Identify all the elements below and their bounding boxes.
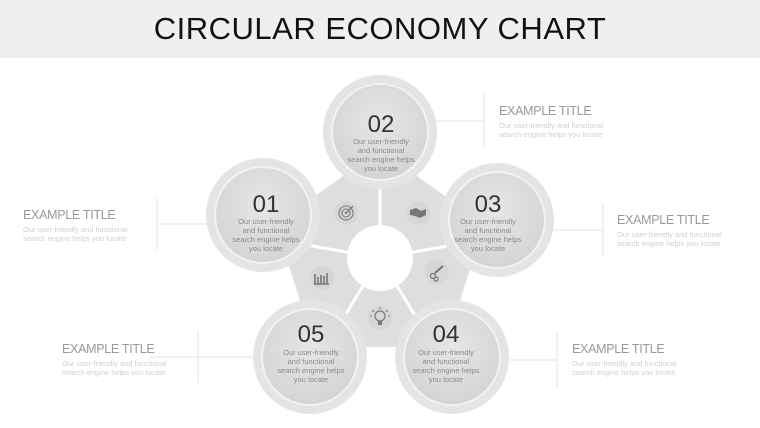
side text: 04: [572, 342, 677, 377]
circle texts: search engine helps: [454, 235, 522, 244]
icon: handshake: [406, 201, 430, 225]
circle texts: [232, 111, 522, 384]
side text: 03: EXAMPLE TITLE: [617, 213, 709, 227]
circle texts: you locate: [471, 244, 505, 253]
circle texts: search engine helps: [412, 366, 480, 375]
circle texts: you locate: [294, 375, 328, 384]
side text: 04: search engine helps you locate: [572, 368, 675, 377]
side text: 03: [617, 213, 722, 248]
side text: 02: EXAMPLE TITLE: [499, 104, 591, 118]
circle texts: and functional: [288, 357, 335, 366]
side text: 02: [499, 104, 604, 139]
side text: 05: Our user-friendly and functional: [62, 359, 167, 368]
circle texts: 03: [475, 191, 501, 218]
circle 03: [440, 163, 554, 277]
circle 05: [253, 300, 367, 414]
circle 04: [395, 300, 509, 414]
side text: 01: search engine helps you locate: [23, 234, 126, 243]
circle texts: Our user-friendly: [238, 217, 294, 226]
side text: 04: EXAMPLE TITLE: [572, 342, 664, 356]
side text: 01: Our user-friendly and functional: [23, 225, 128, 234]
side text: 04: Our user-friendly and functional: [572, 359, 677, 368]
icon: key: [425, 260, 449, 284]
side text: 01: [23, 208, 128, 243]
side text: 05: search engine helps you locate: [62, 368, 165, 377]
circle texts: and functional: [243, 226, 290, 235]
circle texts: Our user-friendly: [418, 348, 474, 357]
circle texts: 01: [253, 191, 279, 218]
circle texts: you locate: [364, 164, 398, 173]
header bar: [0, 0, 760, 58]
side text: 05: [62, 342, 167, 377]
diagram: pentagon background: [290, 165, 470, 340]
side text: 03: search engine helps you locate: [617, 239, 720, 248]
icon: bulb: [368, 306, 392, 330]
circle texts: and functional: [423, 357, 470, 366]
circle texts: 05: [298, 321, 324, 348]
circle texts: 02: [368, 111, 394, 138]
side text: 05: EXAMPLE TITLE: [62, 342, 154, 356]
side text: 02: search engine helps you locate: [499, 130, 602, 139]
circle texts: 04: [433, 321, 459, 348]
circle texts: search engine helps: [277, 366, 345, 375]
circle texts: you locate: [249, 244, 283, 253]
title: CIRCULAR ECONOMY CHART: [154, 11, 606, 46]
icon: target: [334, 201, 358, 225]
circle texts: and functional: [358, 146, 405, 155]
circle texts: you locate: [429, 375, 463, 384]
circle texts: Our user-friendly: [460, 217, 516, 226]
circle texts: and functional: [465, 226, 512, 235]
side text: 02: Our user-friendly and functional: [499, 121, 604, 130]
side text: 03: Our user-friendly and functional: [617, 230, 722, 239]
circle 02: [323, 75, 437, 189]
circle 01: [206, 158, 320, 272]
icon: chart: [310, 266, 334, 290]
side text: 01: EXAMPLE TITLE: [23, 208, 115, 222]
circle texts: search engine helps: [347, 155, 415, 164]
circle texts: Our user-friendly: [353, 137, 409, 146]
circle texts: search engine helps: [232, 235, 300, 244]
circle texts: Our user-friendly: [283, 348, 339, 357]
